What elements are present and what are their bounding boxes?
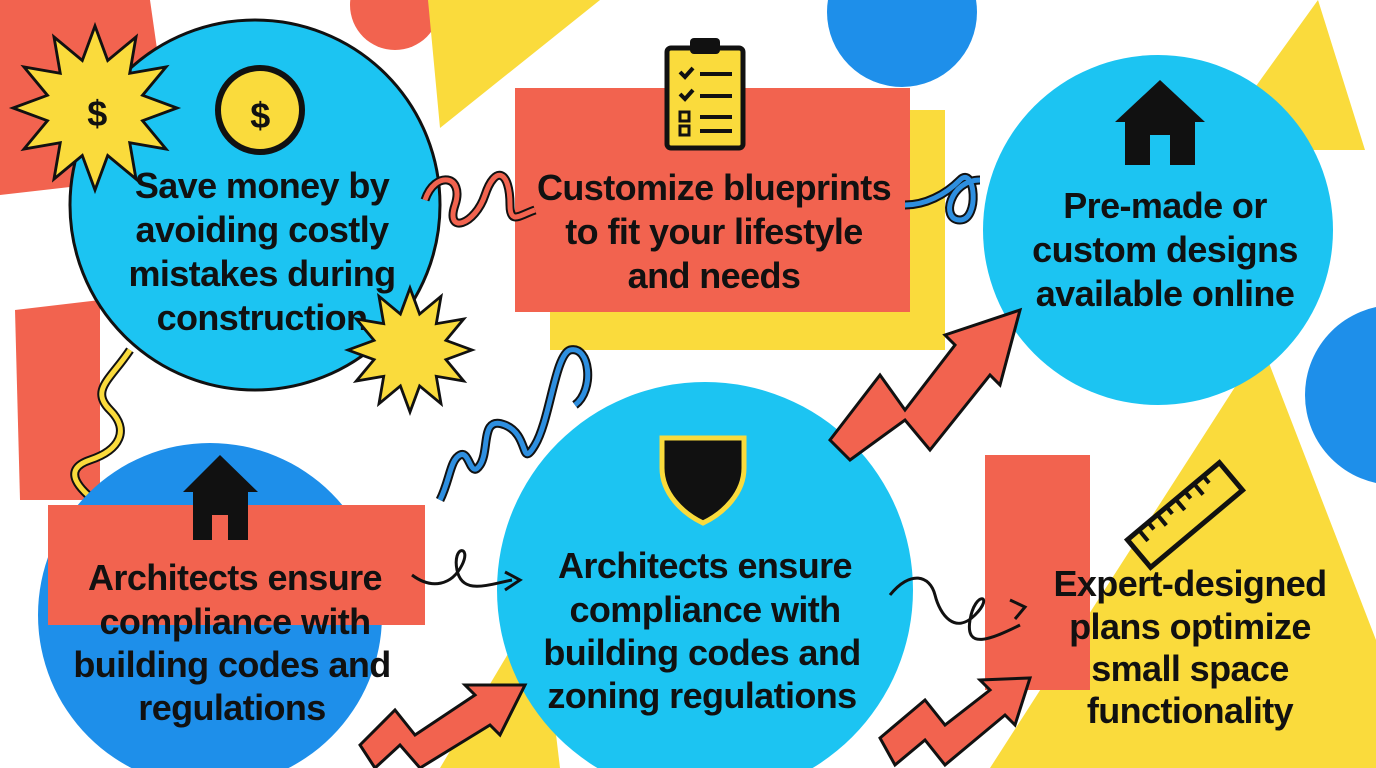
text: pre-made: Pre-made or bbox=[1063, 185, 1267, 226]
icon: clipboard bbox=[667, 38, 743, 148]
icon: dollar coin: $ bbox=[250, 95, 270, 136]
text: save money: construction bbox=[157, 297, 367, 338]
panel: architects compliance 1 bbox=[38, 443, 425, 768]
arrow: yellow wavy down bbox=[75, 350, 130, 515]
text: customize: to fit your lifestyle bbox=[565, 211, 863, 252]
text: architects 2: compliance with bbox=[569, 589, 841, 630]
arrow: black squiggle 2 bbox=[890, 578, 1025, 639]
text: save money: avoiding costly bbox=[135, 209, 389, 250]
text: save money: Save money by bbox=[135, 165, 390, 206]
icon: house 2 bbox=[183, 455, 258, 540]
arrow: red squiggle bbox=[425, 175, 535, 223]
text: customize: and needs bbox=[628, 255, 800, 296]
text: expert: plans optimize bbox=[1069, 606, 1311, 647]
arrow: red zigzag bottom left bbox=[360, 685, 525, 768]
icon: starburst dollar bbox=[13, 26, 177, 190]
panel: architects compliance 2 bbox=[497, 382, 913, 768]
text: architects 2: Architects ensure bbox=[558, 545, 852, 586]
text: customize: Customize blueprints bbox=[537, 167, 891, 208]
arrow: blue squiggle top bbox=[905, 177, 980, 220]
text: architects 1: Architects ensure bbox=[88, 557, 382, 598]
text: pre-made: custom designs bbox=[1032, 229, 1298, 270]
panel: expert-designed bbox=[1053, 463, 1327, 731]
icon: house bbox=[1115, 80, 1205, 165]
panel: pre-made designs bbox=[983, 55, 1333, 405]
text: architects 2: building codes and bbox=[543, 632, 861, 673]
text: save money: mistakes during bbox=[128, 253, 396, 294]
icon: dollar coin bbox=[218, 68, 302, 152]
icon: starburst small bbox=[348, 288, 472, 412]
icon: ruler bbox=[1127, 463, 1243, 567]
panel: customize blueprints bbox=[515, 38, 945, 350]
text: architects 1: regulations bbox=[138, 687, 326, 728]
icon: starburst dollar: $ bbox=[87, 93, 107, 134]
text: architects 1: compliance with bbox=[99, 601, 371, 642]
arrow: red zigzag bottom right bbox=[880, 678, 1030, 765]
text: architects 2: zoning regulations bbox=[547, 675, 857, 716]
text: expert: small space bbox=[1091, 648, 1289, 689]
panel: save money circle bbox=[13, 20, 440, 390]
arrow: red zigzag top right bbox=[830, 310, 1020, 460]
text: expert: functionality bbox=[1087, 690, 1294, 731]
text: pre-made: available online bbox=[1036, 273, 1294, 314]
arrow: blue squiggle middle bbox=[440, 350, 588, 500]
text: expert: Expert-designed bbox=[1053, 563, 1327, 604]
arrow: black squiggle 1 bbox=[412, 551, 520, 590]
text: architects 1: building codes and bbox=[73, 644, 391, 685]
icon: shield bbox=[662, 438, 744, 523]
